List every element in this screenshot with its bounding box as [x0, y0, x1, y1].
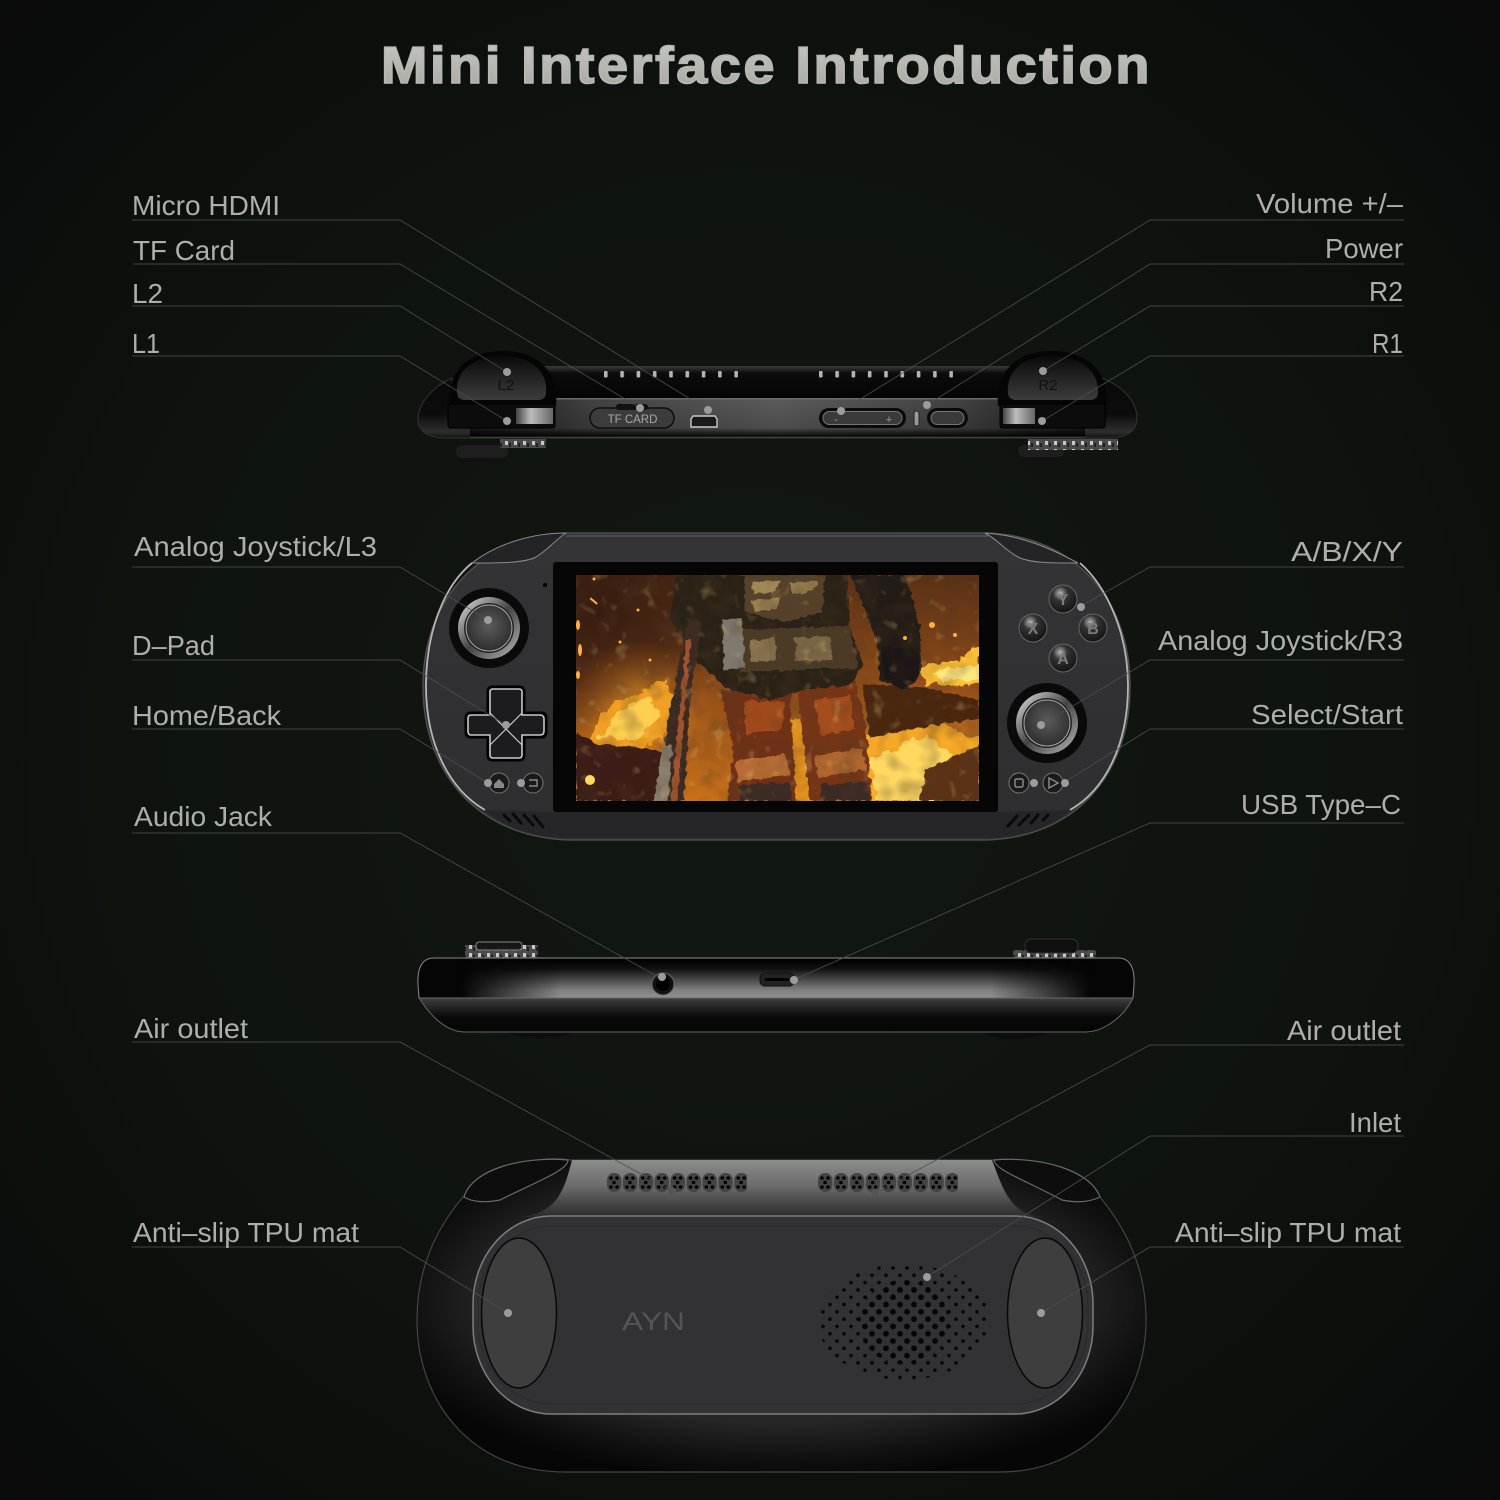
leader: Analog Joystick/R3 — [1041, 660, 1404, 725]
left chrome edge — [426, 563, 485, 810]
leader: Analog Joystick/L3 — [132, 567, 488, 620]
right air outlet vents — [818, 1173, 958, 1192]
label: Power: Power — [1325, 233, 1403, 264]
volume rocker: + — [886, 414, 892, 426]
left grip loop — [464, 1159, 568, 1202]
label: Micro HDMI: Micro HDMI — [132, 190, 280, 221]
right TPU mat — [1008, 1238, 1082, 1388]
right shoulder — [985, 533, 1078, 563]
shell grips — [418, 378, 1137, 438]
top edge highlight — [566, 535, 988, 537]
right grip loop — [994, 1159, 1100, 1202]
vent deck — [518, 1160, 1045, 1217]
bottom sticks and buttons, right — [1018, 439, 1118, 457]
rear bumps — [504, 1030, 1050, 1039]
label: D-Pad: D–Pad — [132, 630, 215, 661]
select button — [1009, 773, 1029, 793]
right speaker slots — [1008, 815, 1048, 826]
label: Home/Back: Home/Back — [132, 700, 282, 731]
leader: L1 — [132, 356, 507, 421]
rifle — [654, 618, 702, 801]
AYN logo: AYN — [622, 1308, 685, 1336]
highlight band — [468, 967, 1084, 998]
start button — [1043, 773, 1063, 793]
leader: Micro HDMI — [132, 220, 708, 410]
leader: L2 — [132, 306, 507, 372]
left speaker slots — [504, 814, 543, 827]
L2 trigger — [449, 351, 556, 406]
R2 trigger: R2 — [1038, 377, 1058, 394]
face button Y — [1049, 585, 1077, 613]
shell upper — [418, 958, 1134, 998]
left TPU mat — [482, 1238, 556, 1388]
soldier torso and arm — [670, 575, 921, 700]
power button — [927, 408, 968, 428]
label: L2: L2 — [132, 278, 163, 309]
label: TF Card: TF Card — [133, 235, 235, 266]
L1 bumper — [448, 404, 555, 428]
label: USB Type-C: USB Type–C — [1241, 789, 1401, 820]
callout dots — [484, 367, 1085, 1317]
audio jack — [652, 973, 674, 995]
title: Mini Interface Introduction — [381, 37, 1152, 95]
right joystick — [1007, 683, 1087, 763]
label: Air outlet left: Air outlet — [134, 1013, 248, 1044]
screen artwork: fire and armoured soldier — [576, 575, 979, 801]
screen bezel — [553, 562, 998, 812]
leader: Air outlet right — [875, 1045, 1404, 1193]
leader: Power — [927, 264, 1404, 405]
speaker inlet grille — [818, 1264, 990, 1380]
label: Inlet: Inlet — [1349, 1107, 1401, 1138]
leader: Home/Back — [132, 729, 488, 783]
shell — [417, 1159, 1146, 1472]
R1 bumper — [1000, 404, 1105, 428]
back button — [523, 773, 543, 793]
leader: Volume — [841, 220, 1404, 411]
rear upper band with vent slots — [520, 366, 1040, 402]
label: Analog Joystick/R3: Analog Joystick/R3 — [1158, 625, 1403, 656]
leader: R1 — [1042, 356, 1404, 421]
face button X: X — [1028, 621, 1039, 638]
top controls, right — [1013, 939, 1096, 958]
label: R1: R1 — [1372, 328, 1403, 359]
leader: D-Pad — [132, 660, 506, 725]
label: A/B/X/Y: A/B/X/Y — [1291, 536, 1403, 567]
left labels — [132, 190, 377, 1248]
status light — [914, 411, 919, 426]
L2 trigger: L2 — [498, 377, 514, 394]
face button A: A — [1057, 651, 1069, 668]
right labels — [1158, 188, 1403, 1248]
TF card slot — [590, 404, 674, 428]
shell — [423, 533, 1130, 840]
mic hole — [543, 583, 547, 587]
painted texture dark — [576, 575, 979, 801]
flames — [588, 650, 979, 801]
device: bottom view — [418, 939, 1134, 1039]
debris — [576, 684, 979, 801]
label: Analog Joystick/L3: Analog Joystick/L3 — [134, 531, 377, 562]
R2 trigger — [998, 351, 1107, 406]
face button B: B — [1087, 621, 1099, 638]
device: front view — [422, 532, 1131, 841]
leader: Air outlet left — [132, 1042, 672, 1191]
label: L1: L1 — [132, 328, 160, 359]
volume rocker — [819, 408, 906, 428]
label: Air outlet right: Air outlet — [1287, 1015, 1401, 1046]
left air outlet vents — [607, 1173, 747, 1192]
volume rocker: - — [834, 414, 838, 426]
top controls, left — [465, 942, 538, 958]
leader lines — [132, 220, 1404, 1313]
sparks — [576, 578, 957, 785]
panel inner contour — [478, 1226, 1088, 1404]
right chrome edge — [1070, 563, 1128, 810]
label: R2: R2 — [1369, 276, 1403, 307]
USB-C port — [760, 973, 794, 986]
left joystick — [449, 588, 529, 668]
soldier legs — [720, 680, 872, 801]
micro HDMI port — [691, 416, 717, 427]
TF card slot: TF CARD — [608, 414, 657, 426]
leader: R2 — [1043, 306, 1404, 371]
label: Anti-slip TPU mat left: Anti–slip TPU mat — [133, 1217, 359, 1248]
leader: A/B/X/Y — [1081, 567, 1404, 606]
bottom sticks and buttons, left — [456, 439, 546, 458]
leader: Inlet — [927, 1136, 1404, 1277]
leader: Audio Jack — [132, 833, 662, 979]
left shoulder — [472, 533, 566, 563]
label: Anti-slip TPU mat right: Anti–slip TPU mat — [1175, 1217, 1401, 1248]
painted texture embers — [576, 575, 979, 801]
front band — [470, 398, 1085, 438]
leader: Anti-slip right — [1041, 1247, 1404, 1313]
lower lip — [485, 810, 1070, 838]
face button A — [1049, 644, 1077, 672]
leader: USB Type-C — [793, 823, 1404, 980]
home button — [489, 773, 509, 793]
label: Volume: Volume +/– — [1256, 188, 1403, 219]
shell lower — [419, 998, 1133, 1032]
rear panel — [473, 1216, 1093, 1414]
face button Y: Y — [1058, 592, 1069, 609]
face button X — [1019, 614, 1047, 642]
device: rear view — [417, 1159, 1146, 1472]
face button B — [1079, 614, 1107, 642]
label: Audio Jack: Audio Jack — [134, 801, 273, 832]
D-pad — [466, 687, 546, 760]
device: top view — [418, 351, 1137, 458]
leader: Anti-slip left — [132, 1247, 508, 1313]
leader: Select/Start — [1063, 729, 1404, 783]
leader: TF Card — [133, 264, 640, 408]
label: Select/Start: Select/Start — [1251, 699, 1403, 730]
